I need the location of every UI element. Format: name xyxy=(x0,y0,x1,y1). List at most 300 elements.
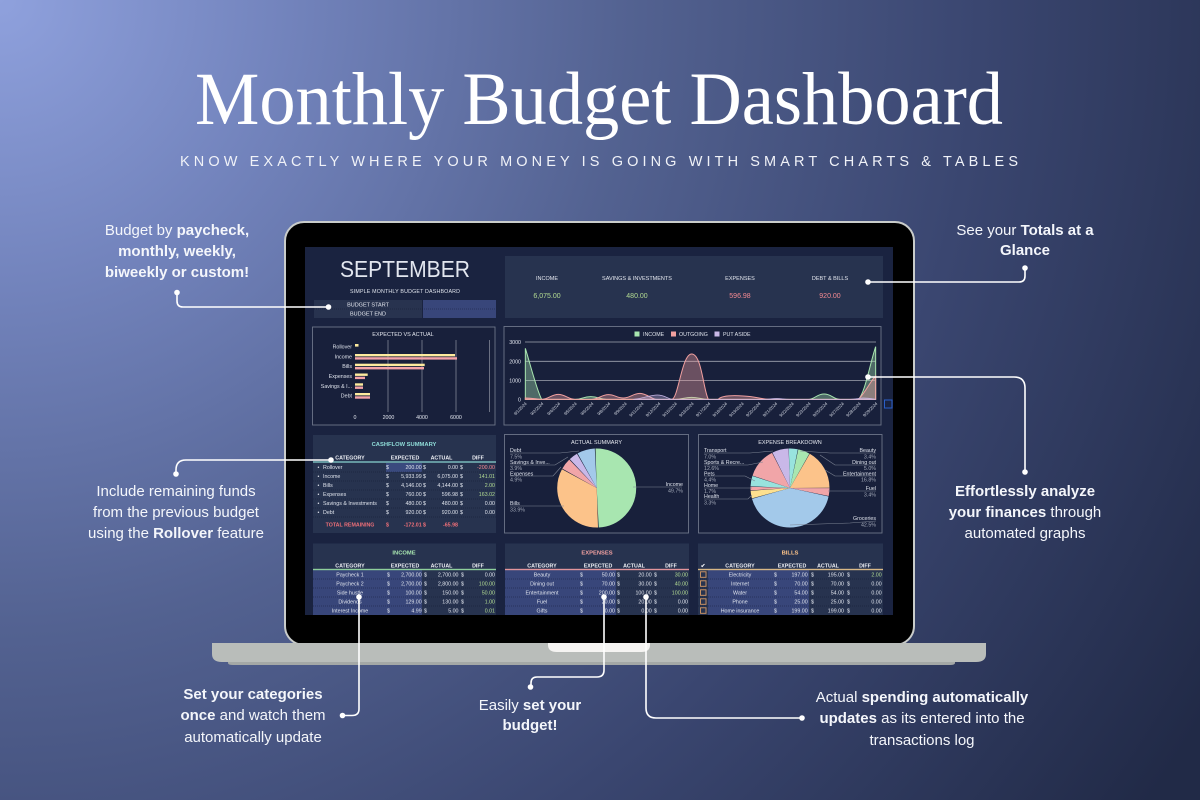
table: income: 150.00 xyxy=(442,590,459,596)
table: expenses: 20.00 xyxy=(638,600,652,606)
pie chart: expense breakdown: Beauty xyxy=(860,448,876,454)
table: expenses: 20.00 xyxy=(638,572,652,578)
table: expenses: $ xyxy=(617,608,620,614)
table: bills: 54.00 xyxy=(794,590,808,596)
callout: set your categories: Set your categories xyxy=(183,686,323,703)
table: cashflow summary: $ xyxy=(386,510,389,516)
table: bills: ACTUAL xyxy=(817,564,840,570)
kpi panel: 480.00 xyxy=(626,293,648,300)
pie chart: actual summary: Bills xyxy=(510,501,520,507)
table: expenses: Entertainment xyxy=(526,590,559,596)
table: bills xyxy=(698,544,883,615)
table: bills: $ xyxy=(811,572,814,578)
table: income: $ xyxy=(461,582,464,588)
table: cashflow summary: $ xyxy=(460,465,463,471)
table: expenses: EXPECTED xyxy=(584,564,612,570)
table: expenses: 100.00 xyxy=(672,590,688,596)
table: cashflow summary: • xyxy=(318,510,320,516)
table: bills: ✔ xyxy=(701,564,705,570)
kpi panel: INCOME xyxy=(536,276,558,282)
table: cashflow summary: -65.98 xyxy=(443,522,458,528)
table: cashflow summary: 596.98 xyxy=(442,492,458,498)
table: expenses: $ xyxy=(580,590,583,596)
bar chart: expected vs actual: 0 xyxy=(354,415,357,421)
bar chart: expected vs actual: 2000 xyxy=(383,415,394,421)
line chart: income outgoing put aside: 9/28/2024 xyxy=(845,401,862,418)
table: cashflow summary: • xyxy=(318,465,320,471)
table: bills: 0.00 xyxy=(871,600,882,606)
table: income: $ xyxy=(387,590,390,596)
pie chart: expense breakdown: Entertainment xyxy=(843,472,877,478)
table: income: 100.00 xyxy=(479,582,495,588)
pie chart: actual summary: 3.9% xyxy=(510,466,522,472)
table: income: EXPECTED xyxy=(391,564,419,570)
bar chart: expected vs actual: 6000 xyxy=(450,415,462,421)
table: income: 129.00 xyxy=(405,600,422,606)
table: expenses: 30.00 xyxy=(638,582,652,588)
callout: rollover: using the Rollover feature xyxy=(88,525,264,542)
table: cashflow summary: 0.00 xyxy=(448,465,458,471)
table: expenses: CATEGORY xyxy=(527,564,557,570)
table: bills: DIFF xyxy=(859,564,872,570)
pie chart: actual summary: Income xyxy=(666,482,683,488)
table: income: 5.00 xyxy=(448,608,459,614)
table: expenses: $ xyxy=(580,600,583,606)
table: cashflow summary: $ xyxy=(386,483,389,489)
callout: set your categories: automatically update xyxy=(184,729,322,746)
table: expenses: $ xyxy=(654,608,657,614)
pie chart: expense breakdown: 42.5% xyxy=(861,522,876,528)
callout: automated graphs: your finances through xyxy=(949,504,1101,521)
callout: totals at a glance xyxy=(865,222,1094,285)
bar chart: expected vs actual: Expenses xyxy=(329,374,352,380)
callout: set your budget: budget! xyxy=(503,717,557,734)
table: cashflow summary: CASHFLOW SUMMARY xyxy=(372,442,437,448)
table: expenses: 30.00 xyxy=(675,572,688,578)
pie chart: actual summary: ACTUAL SUMMARY xyxy=(571,440,622,446)
line chart: income outgoing put aside: 9/22/2024 xyxy=(778,401,795,418)
table: expenses: $ xyxy=(654,572,657,578)
kpi panel: EXPENSES xyxy=(725,276,755,282)
table: bills: $ xyxy=(811,582,814,588)
pie chart: actual summary xyxy=(504,434,688,533)
kpi panel: 596.98 xyxy=(729,293,751,300)
line chart: income outgoing put aside: 9/27/2024 xyxy=(828,401,845,418)
callout: rollover xyxy=(88,457,334,542)
table: cashflow summary: ACTUAL xyxy=(431,456,453,462)
table: income: ACTUAL xyxy=(431,564,453,570)
callout: budget by paycheck: biweekly or custom! xyxy=(105,264,249,281)
table: bills: $ xyxy=(847,608,850,614)
table: cashflow summary: 0.00 xyxy=(485,501,495,507)
table: cashflow summary: $ xyxy=(460,510,463,516)
table: bills: 70.00 xyxy=(794,582,808,588)
table: cashflow summary: CATEGORY xyxy=(335,456,365,462)
table: bills: 0.00 xyxy=(871,582,882,588)
table: cashflow summary: Income xyxy=(323,474,340,480)
table: expenses: 200.00 xyxy=(599,590,615,596)
table: bills: 25.00 xyxy=(831,600,844,606)
table: income: $ xyxy=(387,600,390,606)
table: cashflow summary: 4,146.00 xyxy=(401,483,422,489)
pie chart: expense breakdown: 3.4% xyxy=(864,454,876,460)
table: expenses: 0.00 xyxy=(678,600,688,606)
table: income: 0.01 xyxy=(485,608,495,614)
chart legend xyxy=(634,332,751,338)
line chart: income outgoing put aside: 9/17/2024 xyxy=(695,401,712,418)
table: cashflow summary: -172.01 xyxy=(404,522,422,528)
pie chart: expense breakdown: 7.0% xyxy=(704,454,716,460)
pie chart: expense breakdown: Dining out xyxy=(852,460,877,466)
callout: set your budget xyxy=(479,594,607,734)
table: bills: $ xyxy=(811,600,814,606)
chart legend: PUT ASIDE xyxy=(723,332,751,338)
table: cashflow summary: 480.00 xyxy=(442,501,458,507)
table: cashflow summary: $ xyxy=(460,483,463,489)
callout: totals at a glance: Glance xyxy=(1000,242,1050,259)
table: income: 100.00 xyxy=(405,590,422,596)
table: cashflow summary: Bills xyxy=(323,483,333,489)
table: income: $ xyxy=(387,608,390,614)
title: Monthly Budget Dashboard xyxy=(195,58,1003,141)
table: income: INCOME xyxy=(392,550,416,556)
table: cashflow summary: 760.00 xyxy=(405,492,422,498)
callout: automated graphs: Effortlessly analyze xyxy=(955,483,1095,500)
pie chart: actual summary: 33.9% xyxy=(510,508,525,514)
table: cashflow summary: • xyxy=(318,474,320,480)
pie chart: expense breakdown xyxy=(698,434,882,533)
laptop xyxy=(212,222,986,665)
pie chart: actual summary: 7.5% xyxy=(510,454,522,460)
table: bills: $ xyxy=(774,608,777,614)
table: income: $ xyxy=(424,600,427,606)
table: expenses: $ xyxy=(580,608,583,614)
table: bills: Phone xyxy=(732,600,748,606)
table: expenses: DIFF xyxy=(665,564,678,570)
table: bills: $ xyxy=(774,572,777,578)
table: income: Interest Income xyxy=(332,608,368,614)
table: bills: CATEGORY xyxy=(725,564,755,570)
table: cashflow summary: 5,933.99 xyxy=(401,474,422,480)
kpi panel: 6,075.00 xyxy=(533,293,561,300)
callout: set your categories: once and watch them xyxy=(180,707,326,724)
table: expenses: 0.00 xyxy=(641,608,652,614)
callout: actual spending: updates as its entered into the xyxy=(819,710,1025,727)
line chart: income outgoing put aside: 9/20/2024 xyxy=(745,401,762,418)
bar chart: expected vs actual: Savings & I... xyxy=(321,384,352,390)
table: income: Side hustle xyxy=(337,590,363,596)
table: cashflow summary: Debt xyxy=(323,510,335,516)
table: expenses: 0.00 xyxy=(678,608,688,614)
icon: comment marker xyxy=(884,400,892,408)
callout: actual spending xyxy=(643,594,1029,749)
table: expenses: Beauty xyxy=(534,572,551,578)
callout: rollover: from the previous budget xyxy=(93,504,260,521)
dashboard screen xyxy=(305,247,893,615)
table: income: 2,700.00 xyxy=(401,582,422,588)
table: cashflow summary: $ xyxy=(460,501,463,507)
table: income: CATEGORY xyxy=(335,564,365,570)
line chart: income outgoing put aside: 3000 xyxy=(509,340,521,346)
table: expenses: $ xyxy=(654,600,657,606)
table: income: $ xyxy=(461,600,464,606)
table: bills: EXPECTED xyxy=(778,564,806,570)
table: income: 50.00 xyxy=(482,590,495,596)
table: income: Paycheck 1 xyxy=(336,572,364,578)
line chart: income outgoing put aside: 0 xyxy=(518,398,521,404)
laptop base xyxy=(212,643,986,665)
table: expenses: $ xyxy=(617,582,620,588)
kpi panel: SAVINGS & INVESTMENTS xyxy=(602,276,672,282)
pie chart: actual summary: 4.9% xyxy=(510,478,522,484)
line chart: income outgoing put aside: 1000 xyxy=(509,378,521,384)
callout: set your categories xyxy=(180,594,362,746)
table: cashflow summary: $ xyxy=(423,465,426,471)
line chart: income outgoing put aside: 9/1/2024 xyxy=(513,401,528,416)
table: cashflow summary: Savings & Investments xyxy=(323,501,377,507)
table: bills: Internet xyxy=(731,582,750,588)
table: expenses: 70.00 xyxy=(602,582,615,588)
table: bills: $ xyxy=(847,590,850,596)
table: cashflow summary: -200.00 xyxy=(477,465,495,471)
table: bills: $ xyxy=(847,572,850,578)
table: bills: Water xyxy=(733,590,747,596)
pie chart: actual summary: 49.7% xyxy=(668,488,683,494)
table: cashflow summary: $ xyxy=(460,492,463,498)
table: expenses: $ xyxy=(654,582,657,588)
table: income: 0.00 xyxy=(485,572,495,578)
bar chart: expected vs actual: Rollover xyxy=(333,344,352,350)
table: bills: 0.00 xyxy=(871,590,882,596)
table: income: $ xyxy=(424,590,427,596)
table: bills: $ xyxy=(847,582,850,588)
line chart: income outgoing put aside: 9/21/2024 xyxy=(761,401,779,418)
table: income: $ xyxy=(461,590,464,596)
table: bills: $ xyxy=(811,590,814,596)
table: income: $ xyxy=(387,572,390,578)
table: bills: 197.00 xyxy=(791,572,808,578)
table: bills: Home insurance xyxy=(721,608,759,614)
table: income: $ xyxy=(424,608,427,614)
table: cashflow summary xyxy=(313,435,496,533)
table: income: $ xyxy=(461,608,464,614)
table: income: $ xyxy=(387,582,390,588)
table: expenses: 50.00 xyxy=(602,572,615,578)
pie chart: expense breakdown: 12.6% xyxy=(704,466,719,472)
table: cashflow summary: $ xyxy=(386,474,389,480)
table: bills: $ xyxy=(774,582,777,588)
line chart: income outgoing put aside: 9/6/2024 xyxy=(579,401,595,416)
line chart: income outgoing put aside: 9/9/2024 xyxy=(613,401,628,416)
table: cashflow summary: DIFF xyxy=(472,456,485,462)
table: cashflow summary: 480.00 xyxy=(405,501,422,507)
table: bills: 199.00 xyxy=(828,608,844,614)
table: bills: $ xyxy=(811,608,814,614)
table: bills: 0.00 xyxy=(871,608,882,614)
month header: BUDGET END xyxy=(350,312,386,318)
callout: budget by paycheck xyxy=(105,222,331,310)
table: expenses: $ xyxy=(654,590,657,596)
table: cashflow summary: $ xyxy=(423,474,426,480)
table: expenses: $ xyxy=(617,590,620,596)
table: bills: $ xyxy=(774,590,777,596)
table: bills: $ xyxy=(847,600,850,606)
callout: budget by paycheck: monthly, weekly, xyxy=(118,243,236,260)
pie chart: actual summary: Expenses xyxy=(510,472,534,478)
callout: set your budget: Easily set your xyxy=(479,697,581,714)
pie chart: expense breakdown: Transport xyxy=(704,448,727,454)
line chart: income outgoing put aside: 9/2/2024 xyxy=(529,401,545,416)
table: cashflow summary: $ xyxy=(386,501,389,507)
table: income: 4.99 xyxy=(411,608,422,614)
table: cashflow summary: 141.01 xyxy=(479,474,495,480)
table: cashflow summary: 2.00 xyxy=(485,483,495,489)
line chart: income outgoing put aside: 9/25/2024 xyxy=(812,401,829,418)
table: income: $ xyxy=(424,572,427,578)
kpi panel: DEBT & BILLS xyxy=(812,276,848,282)
table: cashflow summary: $ xyxy=(423,510,426,516)
table: cashflow summary: $ xyxy=(386,492,389,498)
chart legend: OUTGOING xyxy=(679,332,708,338)
pie chart: expense breakdown: Home xyxy=(704,483,718,489)
kpi panel xyxy=(505,256,883,318)
pie chart: expense breakdown: 3.3% xyxy=(704,500,716,506)
table: income: $ xyxy=(461,572,464,578)
pie chart: expense breakdown: Groceries xyxy=(853,516,876,522)
bar chart: expected vs actual: Debt xyxy=(341,394,353,400)
table: bills: 54.00 xyxy=(831,590,844,596)
table: expenses: Dining out xyxy=(530,582,554,588)
pie chart: expense breakdown: 16.8% xyxy=(861,478,876,484)
line chart: income outgoing put aside: 9/29/2024 xyxy=(862,401,879,418)
pie chart: expense breakdown: 4.4% xyxy=(704,478,716,484)
table: expenses: 0.00 xyxy=(605,608,615,614)
table: cashflow summary: • xyxy=(318,483,320,489)
callout: actual spending: Actual spending automatically xyxy=(816,689,1028,706)
month header: BUDGET START xyxy=(347,302,390,308)
table: bills: 199.00 xyxy=(791,608,808,614)
table: expenses xyxy=(505,544,689,615)
table: bills: 70.00 xyxy=(831,582,844,588)
table: cashflow summary: $ xyxy=(423,492,426,498)
callout: budget by paycheck: Budget by paycheck, xyxy=(105,222,249,239)
line chart: income outgoing put aside: 2000 xyxy=(509,359,521,365)
table: cashflow summary: 163.02 xyxy=(479,492,495,498)
table: cashflow summary: 200.00 xyxy=(405,465,422,471)
line chart: income outgoing put aside: 9/5/2024 xyxy=(563,401,578,416)
table: bills: $ xyxy=(774,600,777,606)
line chart: income outgoing put aside: 9/12/2024 xyxy=(645,401,662,418)
table: cashflow summary: $ xyxy=(423,501,426,507)
table: income: 1.00 xyxy=(485,600,495,606)
pie chart: actual summary: Savings & Inve... xyxy=(510,460,550,466)
line chart: income outgoing put aside: 9/15/2024 xyxy=(661,401,678,418)
bar chart: expected vs actual: EXPECTED VS ACTUAL xyxy=(372,332,434,338)
table: income: 2,800.00 xyxy=(438,582,459,588)
bar chart: expected vs actual: Bills xyxy=(342,364,352,370)
pie chart: actual summary: Debt xyxy=(510,448,522,454)
table: income: 2,700.00 xyxy=(438,572,459,578)
line chart: income outgoing put aside: 9/11/2024 xyxy=(628,401,645,418)
table: expenses: Fuel xyxy=(537,600,547,606)
callout: totals at a glance: See your Totals at a xyxy=(956,222,1094,239)
table: income xyxy=(313,544,496,615)
table: cashflow summary: $ xyxy=(423,522,426,528)
table: expenses: $ xyxy=(580,572,583,578)
table: income: DIFF xyxy=(472,564,485,570)
callout: automated graphs: automated graphs xyxy=(965,525,1085,542)
table: expenses: $ xyxy=(617,600,620,606)
pie chart: expense breakdown: 5.0% xyxy=(864,466,876,472)
line chart: income outgoing put aside: 9/19/2024 xyxy=(728,401,745,418)
pie chart: expense breakdown: EXPENSE BREAKDOWN xyxy=(758,440,822,446)
table: cashflow summary: 920.00 xyxy=(442,510,458,516)
table: cashflow summary: 0.00 xyxy=(485,510,495,516)
line chart: income outgoing put aside: 9/8/2024 xyxy=(596,401,612,416)
month header: SEPTEMBER xyxy=(340,256,470,282)
table: income: Paycheck 2 xyxy=(336,582,364,588)
bar chart: expected vs actual: 4000 xyxy=(416,415,428,421)
table: income: 2,700.00 xyxy=(401,572,422,578)
table: bills: BILLS xyxy=(782,550,799,556)
table: income: 130.00 xyxy=(442,600,459,606)
table: expenses: 40.00 xyxy=(675,582,688,588)
table: expenses: 100.00 xyxy=(635,590,652,596)
month header: SIMPLE MONTHLY BUDGET DASHBOARD xyxy=(350,289,460,295)
pie chart: expense breakdown: 3.4% xyxy=(864,492,876,498)
table: cashflow summary: Expenses xyxy=(323,492,347,498)
table: bills: 25.00 xyxy=(794,600,808,606)
table: expenses: ACTUAL xyxy=(623,564,646,570)
bar chart: expected vs actual xyxy=(312,327,495,425)
callout: actual spending: transactions log xyxy=(869,732,975,749)
table: cashflow summary: $ xyxy=(460,474,463,480)
table: bills: 2.00 xyxy=(871,572,882,578)
pie chart: expense breakdown: Pets xyxy=(704,472,715,478)
table: expenses: EXPENSES xyxy=(581,550,613,556)
table: cashflow summary: $ xyxy=(386,465,389,471)
line chart: income outgoing put aside: 9/23/2024 xyxy=(795,401,812,418)
table: cashflow summary: Rollover xyxy=(323,465,343,471)
table: cashflow summary: $ xyxy=(423,483,426,489)
table: cashflow summary: 920.00 xyxy=(405,510,422,516)
line chart: income outgoing put aside: 9/18/2024 xyxy=(711,401,729,418)
table: cashflow summary: • xyxy=(318,492,320,498)
line chart: income outgoing put aside xyxy=(504,326,881,425)
callout: automated graphs xyxy=(865,374,1101,542)
table: income: $ xyxy=(424,582,427,588)
table: income: Dividends xyxy=(338,600,362,606)
table: expenses: Gifts xyxy=(537,608,548,614)
table: cashflow summary: • xyxy=(318,501,320,507)
table: expenses: 20.00 xyxy=(602,600,615,606)
chart legend: INCOME xyxy=(643,332,665,338)
line chart: income outgoing put aside: 9/16/2024 xyxy=(678,401,695,418)
table: cashflow summary: 6,075.00 xyxy=(437,474,458,480)
table: bills: Electricity xyxy=(729,572,752,578)
pie chart: expense breakdown: Sports & Recre... xyxy=(704,460,744,466)
table: expenses: $ xyxy=(580,582,583,588)
callout: rollover: Include remaining funds xyxy=(96,483,256,500)
bar chart: expected vs actual: Income xyxy=(335,354,352,360)
table: expenses: $ xyxy=(617,572,620,578)
table: cashflow summary: $ xyxy=(386,522,389,528)
line chart: income outgoing put aside: 9/4/2024 xyxy=(546,401,562,416)
table: cashflow summary: TOTAL REMAINING xyxy=(326,522,374,528)
pie chart: expense breakdown: Fuel xyxy=(866,486,876,492)
table: cashflow summary: 4,144.00 xyxy=(437,483,458,489)
pie chart: expense breakdown: Health xyxy=(704,494,719,500)
